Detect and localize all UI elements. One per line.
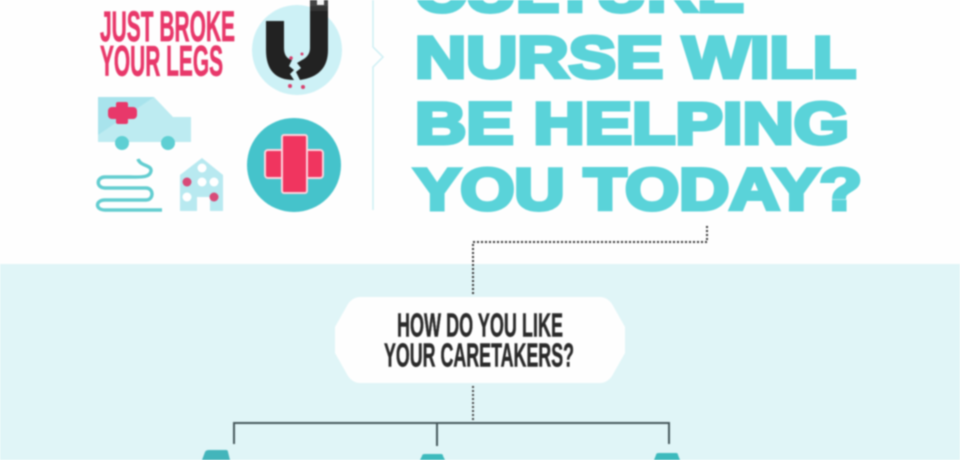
separator with chevron [373, 0, 383, 210]
question bubble: YOUR CARETAKERS? [384, 336, 574, 374]
icon: winding road [98, 159, 162, 210]
dotted connector from question to tree [472, 386, 474, 423]
question bubble: HOW DO YOU LIKE [397, 306, 563, 344]
infographic canvas: JUST BROKE [100, 3, 235, 51]
icon: medical cross badge [247, 118, 341, 212]
title: YOU TODAY? [414, 158, 862, 222]
icon: ambulance [98, 97, 191, 150]
icon: right option top [654, 453, 680, 460]
question bubble [335, 297, 625, 383]
text: just broke your legs: YOUR LEGS [100, 38, 223, 86]
branching tree lines [234, 423, 669, 446]
icon: broken magnet [252, 0, 342, 95]
dotted connector from title to question [473, 226, 707, 296]
panel: lower section background [0, 264, 960, 460]
icon: hospital building [180, 158, 223, 211]
icon: left option top [202, 450, 230, 460]
text: just broke your legs [100, 3, 235, 86]
icon: middle option top [420, 454, 445, 460]
title [414, 0, 862, 222]
title: BE HELPING [415, 92, 849, 156]
title: NURSE WILL [415, 26, 856, 90]
